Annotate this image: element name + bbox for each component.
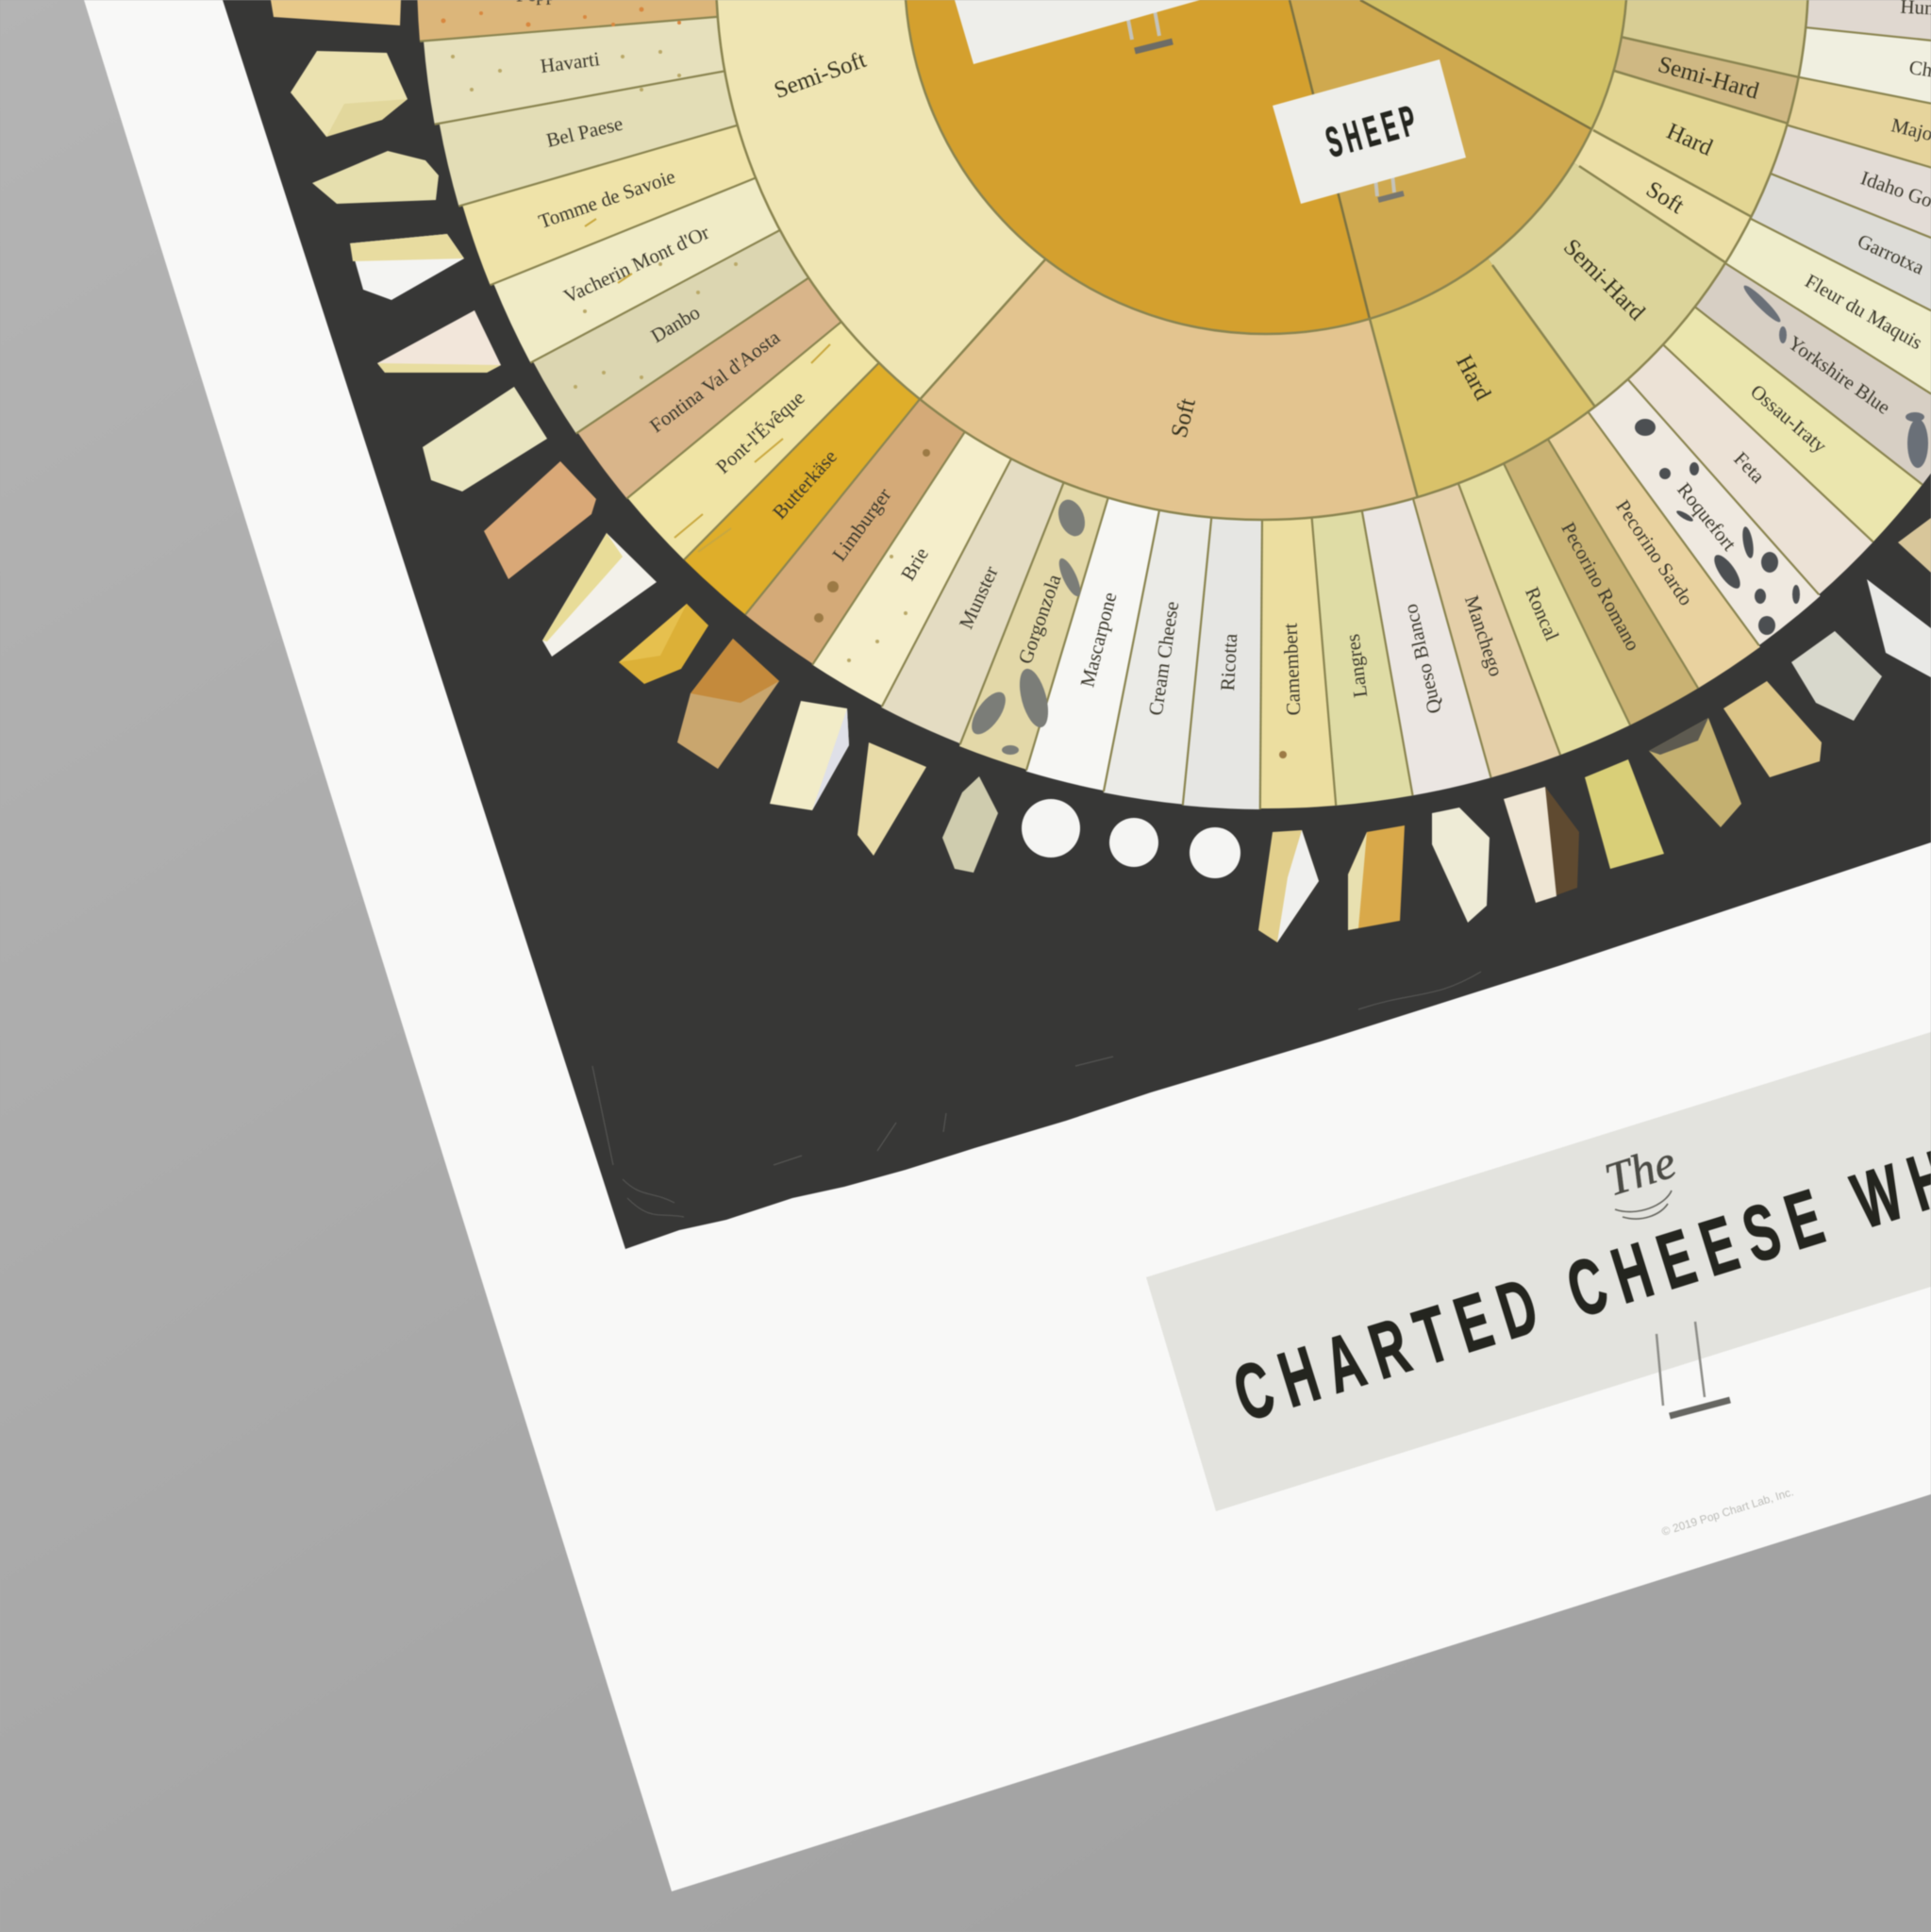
card label: SHEEP xyxy=(1321,95,1425,167)
wedge: Ricotta: Ricotta xyxy=(1216,632,1241,691)
wedge: Roquefort: Roquefort xyxy=(1673,478,1741,555)
cheese: Fontina Val d'Aosta xyxy=(484,461,596,579)
card stand: cow xyxy=(1124,0,1173,51)
cheese illustrations xyxy=(271,0,1931,942)
disc outline xyxy=(905,0,1627,334)
cheese: Danbo xyxy=(423,387,547,491)
segment: semi-soft cow xyxy=(717,0,1044,398)
wedge textures: speckles xyxy=(441,8,1287,758)
wedge: Cream Cheese: Cream Cheese xyxy=(1144,600,1183,717)
segment labels: Hard xyxy=(1451,351,1496,405)
wedge: Butterkäse: Butterkäse xyxy=(768,445,841,524)
cheese: Butterkäse xyxy=(619,604,708,684)
stand xyxy=(1373,157,1404,200)
cheese wheel: outer varieties ring xyxy=(304,0,1931,934)
segment labels: Soft xyxy=(1641,176,1689,219)
blue mould: Yorkshire Blue xyxy=(1740,282,1928,468)
cheese: Pecorino Romano xyxy=(1649,718,1741,827)
wedge: Brie: Brie xyxy=(896,543,933,585)
wedge: Pecorino Sardo: Pecorino Sardo xyxy=(1611,496,1698,609)
cheese: Feta xyxy=(1867,579,1931,677)
segment: hard sheep xyxy=(1371,258,1594,496)
title script: The: The xyxy=(1599,1135,1682,1207)
dark poster panel xyxy=(223,0,1931,1249)
segment labels: Semi-Hard xyxy=(1558,234,1650,325)
wedge: Danbo: Danbo xyxy=(647,301,704,347)
cheese: Cream Cheese xyxy=(1109,818,1158,867)
cheese: Queso Blanco xyxy=(1432,808,1490,923)
cheese: Pecorino Sardo xyxy=(1723,681,1822,777)
panel texture lines xyxy=(592,972,1481,1217)
wedge: Gorgonzola: Gorgonzola xyxy=(1013,571,1066,667)
cheese: Ricotta xyxy=(1190,827,1240,878)
segment dividers xyxy=(919,36,1798,496)
centre disc: milk animals xyxy=(906,0,1625,334)
segment: hard goat xyxy=(1592,72,1787,215)
wedge: Munster: Munster xyxy=(955,563,1003,632)
wedge: Ossau-Iraty: Ossau-Iraty xyxy=(1746,380,1832,458)
segment: soft cow xyxy=(922,260,1416,519)
wedge: Tomme de Savoie: Tomme de Savoie xyxy=(536,165,678,233)
segment labels: Soft xyxy=(1167,396,1201,441)
wedge: Camembert: Camembert xyxy=(1279,623,1305,716)
wedge: Pont-l'Évêque: Pont-l'Évêque xyxy=(711,386,809,478)
cheese: Bel Paese xyxy=(312,151,439,204)
segment: upper goat xyxy=(1623,0,1807,75)
cheese: Pont-l'Évêque xyxy=(542,533,657,657)
cheese: Pepper Jack xyxy=(271,0,401,25)
wedge: Havarti: Havarti xyxy=(539,47,601,77)
cheese: Munster xyxy=(857,742,926,856)
sector: goat xyxy=(1363,0,1625,128)
card: cow xyxy=(955,0,1200,64)
sector: sheep xyxy=(1290,0,1590,317)
cheese: Roquefort xyxy=(1791,631,1882,721)
copyright: © 2019 Pop Chart Lab, Inc. xyxy=(1660,1485,1795,1539)
segment: soft goat xyxy=(1573,129,1750,260)
card: sheep xyxy=(1273,59,1466,204)
cheese: Camembert xyxy=(1258,830,1319,942)
cheese: Tomme de Savoie xyxy=(350,234,464,300)
cheese: Brie xyxy=(770,701,849,810)
wedge: Pecorino Romano: Pecorino Romano xyxy=(1556,519,1645,655)
segment labels: Semi-Soft xyxy=(771,47,870,104)
cheese: Manchego xyxy=(1504,787,1579,903)
cheese: Limburger xyxy=(677,639,779,769)
wedge: Fontina Val d'Aosta: Fontina Val d'Aosta xyxy=(645,325,785,437)
segment labels xyxy=(771,47,1762,441)
blue mould: Gorgonzola xyxy=(965,496,1090,755)
wedge: Bel Paese: Bel Paese xyxy=(544,112,624,152)
wedge: Garrotxa: Garrotxa xyxy=(1855,229,1928,279)
title plate stand xyxy=(1656,1322,1730,1416)
title plate xyxy=(1146,1032,1931,1511)
cheese: Havarti xyxy=(291,51,408,137)
wedge: Yorkshire Blue: Yorkshire Blue xyxy=(1784,331,1894,419)
segment: semi-hard sheep xyxy=(1488,162,1724,406)
wedge: Mascarpone: Mascarpone xyxy=(1075,590,1121,690)
segment labels: Semi-Hard xyxy=(1656,52,1762,105)
card face xyxy=(1273,59,1466,204)
wedge: Feta: Feta xyxy=(1729,447,1770,488)
wedge: Fleur du Maquis: Fleur du Maquis xyxy=(1801,270,1926,354)
wedge separators xyxy=(420,16,1931,809)
wedge: Langres: Langres xyxy=(1341,633,1372,699)
blue mould: Roquefort xyxy=(1635,419,1800,635)
wedge: Queso Blanco: Queso Blanco xyxy=(1399,602,1446,716)
wedge: Limburger: Limburger xyxy=(827,484,895,565)
wedge: Manchego: Manchego xyxy=(1460,592,1507,679)
cheese: Langres xyxy=(1348,825,1405,930)
wedge: Vacherin Mont d'Or: Vacherin Mont d'Or xyxy=(560,221,712,308)
cheese: Gorgonzola xyxy=(942,776,998,873)
cheese: Mascarpone xyxy=(1022,799,1080,858)
sector: cow xyxy=(906,0,1369,334)
cheese: Vacherin Mont d'Or xyxy=(377,310,501,373)
segment: semi-hard goat xyxy=(1615,38,1797,122)
ring outline xyxy=(716,0,1808,520)
wedge: Roncal: Roncal xyxy=(1521,584,1564,644)
sector dividers xyxy=(1289,0,1591,319)
segment labels: Hard xyxy=(1663,119,1717,161)
cheese: Ossau-Iraty xyxy=(1898,518,1931,573)
cheese: Roncal xyxy=(1585,759,1664,869)
milk-type ring: firmness segments xyxy=(717,0,1807,519)
